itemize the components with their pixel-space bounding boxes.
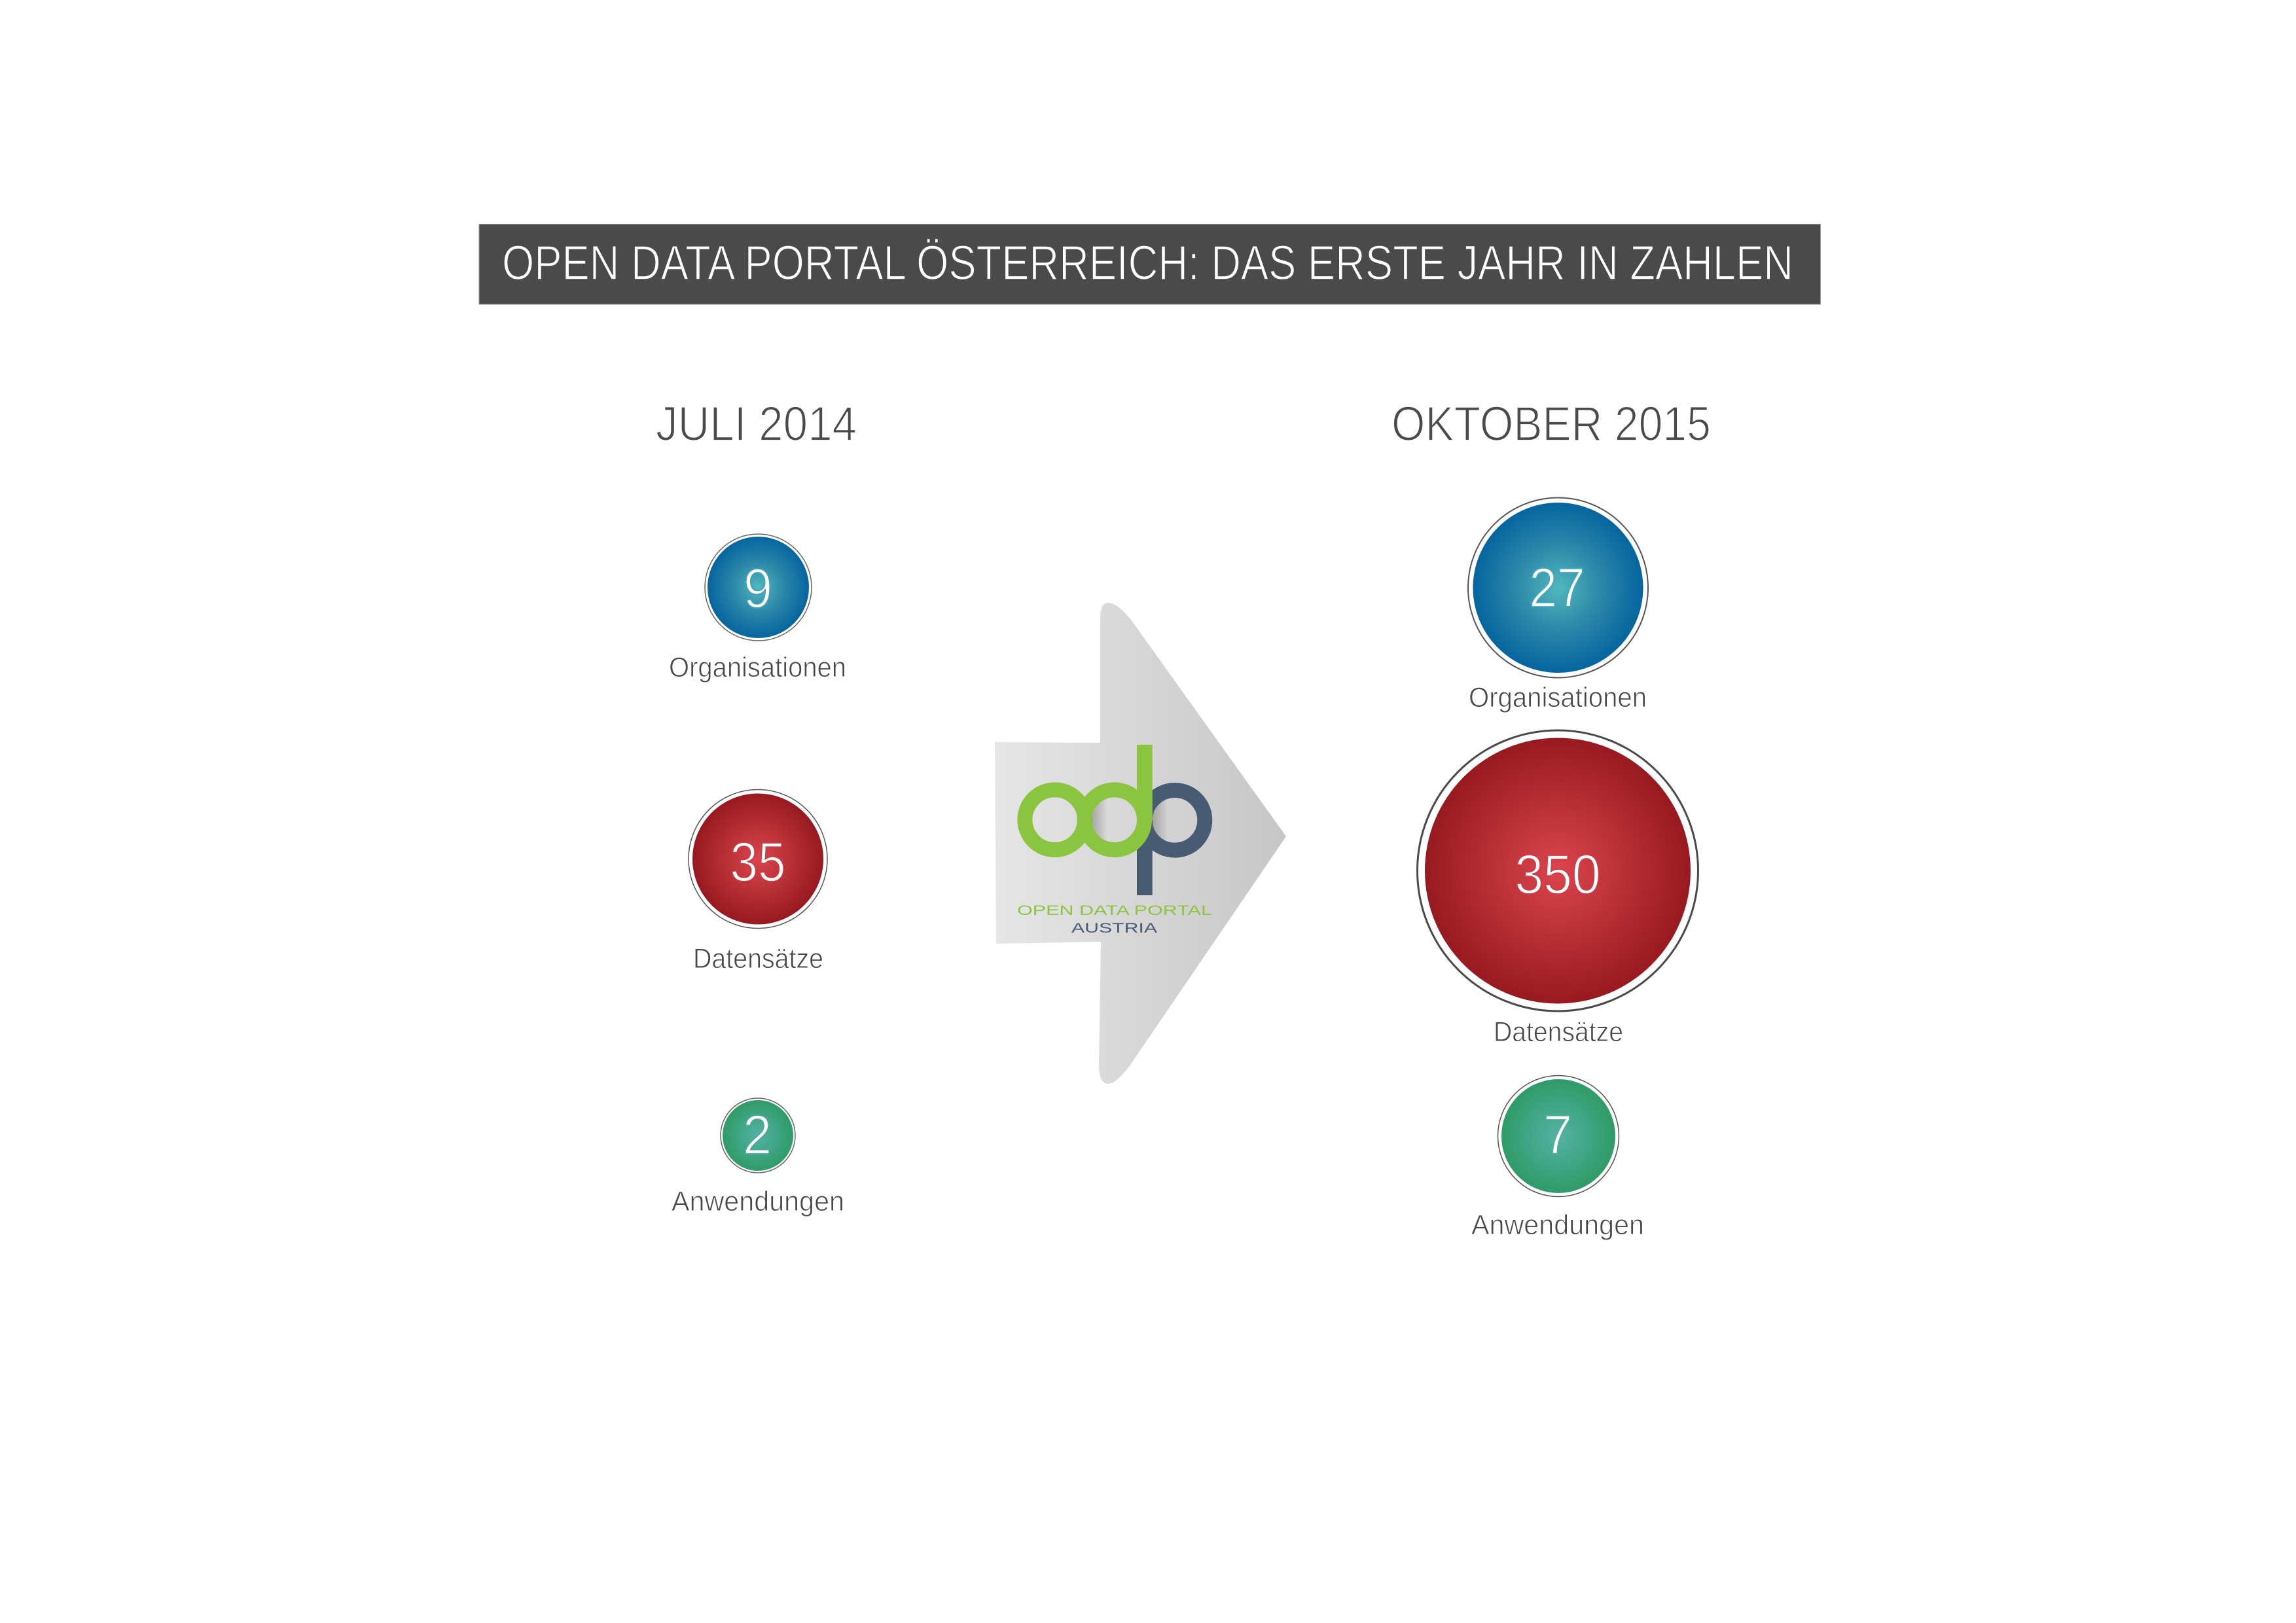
column heading: Oktober 2015: OKTOBER 2015 xyxy=(1391,397,1711,451)
metric: 35 Datensätze xyxy=(689,789,827,974)
logo mark: odp xyxy=(1025,745,1205,895)
metric: 2 Anwendungen: 2 xyxy=(743,1104,772,1166)
title text: OPEN DATA PORTAL ÖSTERREICH: DAS ERSTE JAHR IN ZAHLEN xyxy=(502,236,1793,290)
metric: 7 Anwendungen: 7 xyxy=(1543,1104,1572,1166)
metric: 350 Datensätze: 350 xyxy=(1515,844,1601,905)
metric: 2 Anwendungen xyxy=(672,1098,844,1217)
label: Anwendungen xyxy=(672,1186,844,1217)
arrow with logo xyxy=(995,603,1286,1084)
label: Organisationen xyxy=(1469,682,1647,713)
logo text: Austria: AUSTRIA xyxy=(1071,921,1157,936)
logo text: Open Data Portal: OPEN DATA PORTAL xyxy=(1017,903,1212,918)
metric: 27 Organisationen xyxy=(1468,497,1648,713)
label: Datensätze xyxy=(1494,1016,1623,1048)
metric: 35 Datensätze: 35 xyxy=(730,831,785,893)
label: Datensätze xyxy=(693,943,823,974)
label: Organisationen xyxy=(669,652,846,683)
metric: 9 Organisationen: 9 xyxy=(744,558,772,619)
title banner xyxy=(479,224,1821,304)
metric: 350 Datensätze xyxy=(1418,730,1698,1048)
metric: 27 Organisationen: 27 xyxy=(1529,557,1585,618)
column heading: Juli 2014: JULI 2014 xyxy=(656,397,857,451)
label: Anwendungen xyxy=(1471,1209,1644,1241)
metric: 9 Organisationen xyxy=(669,534,846,683)
metric: 7 Anwendungen xyxy=(1471,1076,1644,1241)
